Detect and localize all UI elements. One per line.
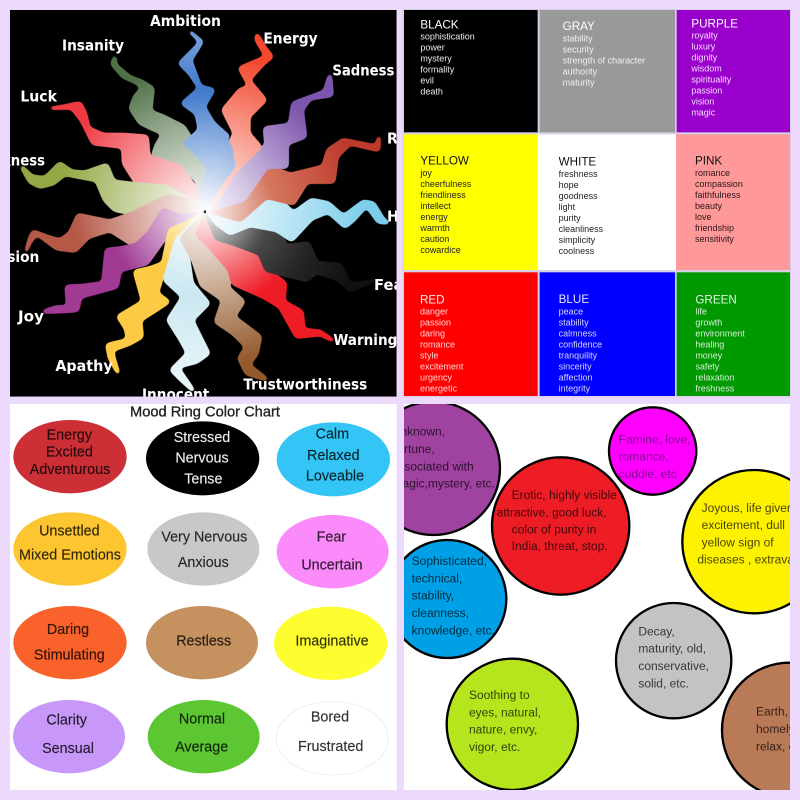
circle: red: color of purity in: [512, 522, 596, 536]
cell: black: sophistication: [420, 31, 475, 41]
oval: tan: [146, 606, 258, 679]
cell: red: daring: [420, 329, 445, 339]
circle: magenta: romance,: [619, 450, 669, 464]
cell: blue: confidence: [559, 339, 602, 349]
cell: red: RED: [420, 293, 445, 306]
oval: pink: Fear: [317, 530, 346, 546]
oval: white: Frustrated: [298, 739, 363, 755]
oval: yellow: Imaginative: [295, 633, 369, 649]
cell: blue: peace: [559, 306, 583, 316]
label: Luck: Luck: [20, 87, 58, 105]
oval: gray: [147, 512, 259, 586]
cell: blue: [540, 272, 675, 396]
oval: blue: Relaxed: [307, 448, 360, 464]
cell: yellow: cowardice: [420, 245, 461, 255]
cell: pink: sensitivity: [695, 234, 734, 244]
wave: hope: [207, 197, 388, 240]
circle: gray: [616, 603, 731, 718]
oval: amber: [13, 512, 127, 586]
cell: pink: PINK: [695, 155, 722, 168]
cell: white: hope: [559, 180, 579, 190]
cell: green: environment: [695, 329, 745, 339]
label: Ambition: Ambition: [150, 12, 221, 30]
label: Warning: Warning: [333, 331, 397, 349]
cell: green: freshness: [695, 384, 735, 394]
cell: black: BLACK: [420, 18, 459, 31]
circle: magenta: cuddle, etc: [619, 467, 677, 481]
circle: green: eyes, natural,: [469, 705, 541, 719]
circle: green: Soothing to: [469, 688, 530, 702]
wave: passion: [26, 197, 203, 252]
cell: yellow: intellect: [420, 201, 451, 211]
cell: gray: authority: [563, 66, 598, 76]
cell: yellow: cheerfulness: [420, 179, 472, 189]
oval: red: Energy: [47, 427, 93, 443]
circle: blue: cleanness,: [412, 606, 469, 620]
wave: sadness: [207, 75, 332, 210]
cell: green: healing: [695, 340, 724, 350]
oval: lavender: Clarity: [46, 712, 88, 728]
wave: ambition: [180, 32, 233, 210]
panel: mood ring color chart: [10, 404, 397, 790]
oval: pink: [277, 515, 389, 588]
circle: red: attractive, good luck,: [497, 505, 607, 519]
label: Fear: Fear: [374, 276, 411, 294]
cell: gray: GRAY: [563, 20, 595, 33]
oval: amber: Unsettled: [39, 524, 100, 540]
cell: red: danger: [420, 307, 448, 317]
circle: green: nature, envy,: [469, 723, 537, 737]
circle: blue: Sophisticated,: [412, 554, 487, 568]
cell: red: style: [420, 351, 438, 361]
oval: red: [13, 420, 127, 493]
wave: sickness: [22, 163, 203, 213]
oval: amber: Mixed Emotions: [19, 548, 121, 564]
oval: blue: [277, 422, 390, 496]
wave: energy: [207, 34, 272, 210]
circle: brown: homely,: [756, 722, 797, 736]
circle: purple: associated with: [392, 459, 474, 473]
cell: green: safety: [695, 362, 720, 372]
cell: black: power: [420, 42, 445, 52]
cell: black: [404, 10, 538, 132]
cell: yellow: joy: [419, 168, 432, 178]
circle: blue: stability,: [412, 589, 454, 603]
wave: warning: [197, 213, 333, 341]
oval: gray: Very Nervous: [161, 530, 247, 546]
wave: joy: [43, 210, 203, 312]
cell: blue: affection: [559, 372, 592, 382]
cell: gray: maturity: [563, 77, 595, 87]
circle: brown: Earth,: [756, 705, 788, 719]
oval: black: [146, 421, 259, 495]
circle: yellow: yellow sign of: [702, 535, 774, 549]
cell: pink: [676, 134, 790, 270]
label: Hope: Hope: [387, 208, 429, 226]
cell: pink: friendship: [695, 223, 734, 233]
circle: blue: knowledge, etc.: [412, 623, 495, 637]
circle: purple: fortune,: [394, 442, 435, 456]
cell: yellow: energy: [420, 212, 448, 222]
label: Energy: Energy: [263, 29, 318, 47]
oval: white: Bored: [311, 710, 349, 726]
cell: red: romance: [420, 340, 455, 350]
cell: purple: [677, 10, 790, 132]
cell: pink: faithfulness: [695, 190, 741, 200]
wave: apathy: [107, 213, 203, 373]
cell: pink: love: [695, 212, 711, 222]
circle: red: India, threat, stop.: [512, 539, 608, 553]
cell: purple: vision: [691, 97, 714, 107]
oval: green: Average: [175, 739, 228, 755]
oval: orange: Daring: [47, 622, 89, 638]
cell: black: death: [420, 86, 443, 96]
oval: red: Adventurous: [30, 462, 110, 478]
label: Sadness: Sadness: [332, 62, 394, 80]
oval: orange: [13, 606, 127, 679]
oval: green: Normal: [179, 711, 225, 727]
cell: black: mystery: [420, 53, 452, 63]
circle: magenta: Famine, love,: [619, 432, 691, 446]
cell: blue: integrity: [559, 383, 591, 393]
label: Trustworthiness: Trustworthiness: [243, 375, 367, 393]
oval: blue: Loveable: [306, 469, 364, 485]
oval: yellow: [274, 607, 387, 680]
cell: red: [404, 272, 538, 396]
panel: color emotion wheel: [10, 10, 397, 397]
cell: yellow: caution: [420, 234, 449, 244]
oval: gray: Anxious: [178, 555, 229, 571]
cell: white: goodness: [559, 191, 598, 201]
oval: black: Tense: [184, 471, 222, 487]
cell: purple: passion: [691, 86, 722, 96]
cell: white: [538, 134, 676, 270]
circle: green: vigor, etc.: [469, 740, 520, 754]
circle: yellow: excitement, dull: [702, 518, 785, 532]
cell: gray: strength of character: [563, 55, 645, 65]
panel: color association circles: [404, 404, 790, 790]
cell: purple: spirituality: [691, 75, 732, 85]
cell: white: WHITE: [559, 156, 596, 169]
wave: fear: [207, 213, 375, 290]
oval: blue: Calm: [316, 427, 349, 443]
cell: purple: magic: [691, 108, 716, 118]
circle: red: [492, 457, 629, 595]
oval: pink: Uncertain: [301, 558, 363, 574]
cell: gray: security: [563, 44, 594, 54]
panel: color meaning grid: [403, 9, 791, 397]
cell: pink: romance: [695, 168, 730, 178]
label: Apathy: Apathy: [55, 357, 113, 375]
cell: blue: sincerity: [559, 361, 592, 371]
oval: lavender: Sensual: [42, 741, 94, 757]
cell: white: freshness: [559, 169, 598, 179]
oval: orange: Stimulating: [34, 647, 105, 663]
cell: green: [677, 272, 790, 396]
cell: purple: PURPLE: [691, 17, 738, 30]
cell: blue: calmness: [559, 328, 597, 338]
cell: pink: beauty: [695, 201, 722, 211]
oval: green: [148, 700, 260, 773]
wave: innocent: [165, 213, 208, 391]
oval: lavender: [13, 700, 125, 773]
cell: red: passion: [420, 318, 451, 328]
cell: red: urgency: [420, 373, 452, 383]
wave: rage: [207, 137, 379, 220]
circle: gray: Decay,: [638, 624, 675, 638]
cell: purple: royalty: [691, 31, 718, 41]
oval: red: Excited: [46, 445, 93, 461]
circle: gray: conservative,: [638, 659, 709, 673]
cell: white: cleanliness: [559, 224, 604, 234]
chart title: Mood Ring Color Chart: [130, 405, 280, 421]
cell: green: GREEN: [695, 293, 737, 306]
cell: black: evil: [420, 75, 434, 85]
cell: blue: BLUE: [559, 293, 589, 306]
cell: yellow: [404, 134, 538, 270]
cell: purple: luxury: [691, 42, 716, 52]
circle: purple: [404, 404, 502, 536]
cell: yellow: friendliness: [420, 190, 466, 200]
circle: gray: solid, etc.: [638, 676, 689, 690]
circle: purple: Unknown,: [392, 425, 445, 439]
cell: red: excitement: [420, 362, 464, 372]
oval: black: Nervous: [175, 451, 229, 467]
cell: purple: dignity: [691, 53, 718, 63]
wave: trustworthiness: [182, 213, 267, 379]
cell: green: life: [695, 307, 707, 317]
cell: blue: stability: [559, 317, 589, 327]
cell: green: relaxation: [695, 373, 734, 383]
label: Innocent: Innocent: [142, 385, 209, 403]
label: Insanity: Insanity: [62, 37, 124, 55]
circle: purple: magic,mystery, etc.: [393, 477, 495, 491]
cell: blue: tranquility: [559, 350, 598, 360]
label: Joy: Joy: [17, 307, 44, 325]
circle: red: Erotic, highly visible: [512, 488, 617, 502]
cell: gray: stability: [563, 33, 593, 43]
circle: blue: [404, 538, 508, 660]
oval: tan: Restless: [176, 633, 231, 649]
circle: brown: [720, 662, 790, 790]
label: Rage: Rage: [387, 130, 427, 148]
cell: pink: compassion: [695, 179, 743, 189]
circle: gray: maturity, old,: [638, 642, 706, 656]
circle: green: [447, 659, 578, 790]
cell: yellow: YELLOW: [420, 155, 469, 168]
cell: white: purity: [559, 213, 581, 223]
cell: red: energetic: [420, 384, 457, 394]
cell: black: formality: [420, 64, 455, 74]
cell: gray: [540, 10, 675, 132]
oval: white: [276, 702, 388, 775]
cell: purple: wisdom: [690, 64, 722, 74]
cell: green: money: [695, 351, 723, 361]
cell: white: light: [559, 202, 576, 212]
circle: magenta: [609, 407, 696, 495]
oval: black: Stressed: [174, 430, 230, 446]
cell: white: simplicity: [559, 235, 596, 245]
circle: yellow: [682, 470, 800, 613]
wave: insanity: [112, 57, 211, 210]
circle: blue: technical,: [412, 571, 462, 585]
wave: luck: [51, 103, 203, 210]
cell: green: growth: [695, 318, 722, 328]
cell: white: coolness: [559, 246, 595, 256]
cell: yellow: warmth: [419, 223, 450, 233]
circle: yellow: Joyous, life giver: [702, 501, 791, 515]
